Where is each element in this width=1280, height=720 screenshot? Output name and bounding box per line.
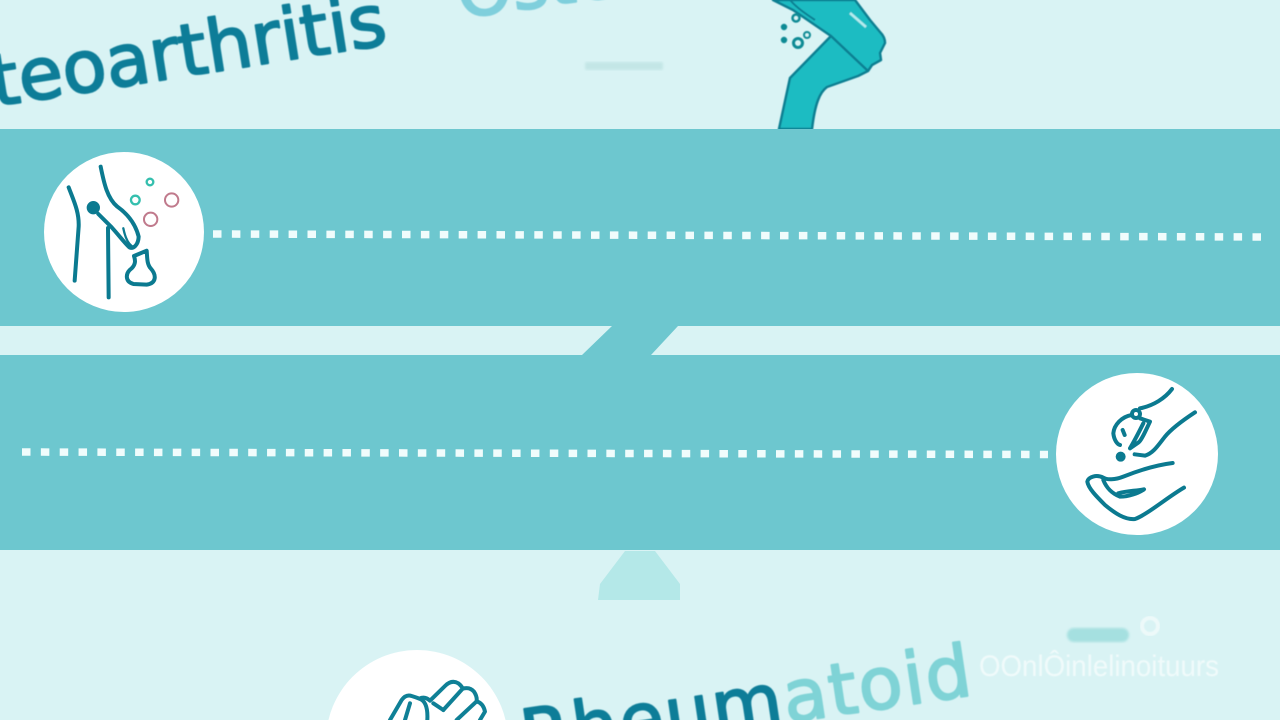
- panel: upper band: [0, 129, 1280, 326]
- lower dotted line: [22, 452, 1048, 454]
- panel: lower band: [0, 355, 1280, 550]
- icon: knee joint illustration: [773, 0, 885, 129]
- icon: clasped hands in white circle: [326, 650, 508, 720]
- faded dash: [585, 62, 663, 70]
- icon: hip and joint in white circle: [44, 152, 204, 312]
- faded pill mark: [1067, 628, 1129, 642]
- icon: hands in white circle: [1056, 373, 1218, 535]
- upper dotted line: [213, 234, 1271, 237]
- faded caption: OOnlÔinlelinoituurs: [979, 649, 1219, 683]
- faded triangle arrow: [598, 551, 680, 600]
- band connector: [582, 326, 678, 355]
- faded ring mark: [1142, 618, 1158, 634]
